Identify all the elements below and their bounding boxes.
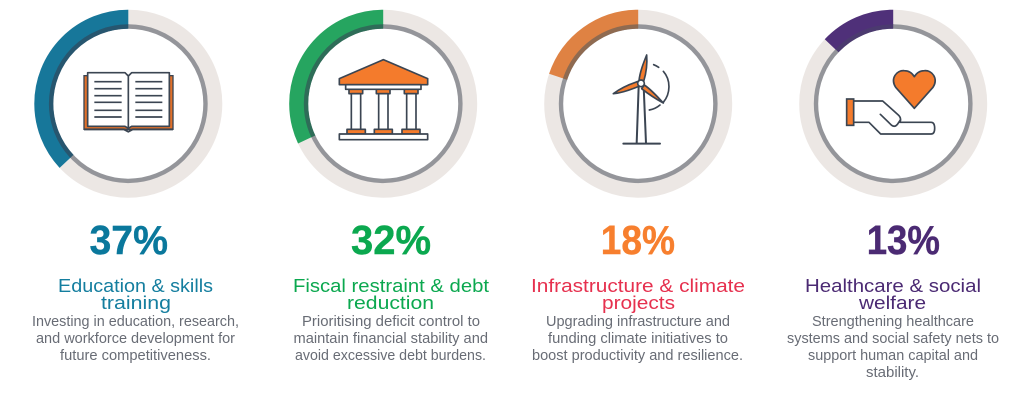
text block: fiscal: Prioritising deficit control to	[302, 313, 480, 330]
panel: healthcare	[787, 17, 999, 381]
percentage: 32%: 32%	[351, 217, 431, 263]
text block: education	[32, 313, 239, 364]
heading: fiscal	[293, 275, 489, 313]
heading: education: Education & skills	[58, 275, 213, 296]
percentage: 37%: 37%	[90, 217, 168, 263]
text block: healthcare	[787, 313, 999, 381]
heading: education	[58, 275, 213, 313]
text block: healthcare: support human capital and	[808, 347, 978, 364]
icon: open book	[84, 73, 173, 132]
donut chart: 32%	[297, 17, 470, 190]
percentage: 18%: 18%	[601, 217, 675, 263]
heading: healthcare: welfare	[858, 292, 926, 313]
text block: infrastructure: Upgrading infrastructure and	[546, 313, 730, 330]
heading: fiscal: Fiscal restraint & debt	[293, 275, 489, 296]
panel: infrastructure	[531, 17, 745, 364]
text block: fiscal	[294, 313, 488, 364]
text block: infrastructure	[532, 313, 743, 364]
heading: infrastructure: projects	[602, 292, 675, 313]
text block: fiscal: maintain financial stability and	[294, 330, 488, 347]
percentage: 13%: 13%	[867, 217, 940, 263]
text block: education: Investing in education, research,	[32, 313, 239, 330]
panel: education	[32, 17, 239, 364]
text block: infrastructure: boost productivity and resilience.	[532, 347, 743, 364]
panel: fiscal	[293, 17, 489, 364]
heading: education: training	[101, 292, 171, 313]
donut chart: 13%	[807, 17, 980, 190]
text block: healthcare: Strengthening healthcare	[812, 313, 974, 330]
icon: wind turbine	[613, 55, 669, 144]
text block: education: future competitiveness.	[60, 347, 211, 364]
text block: fiscal: avoid excessive debt burdens.	[295, 347, 486, 364]
text block: infrastructure: funding climate initiatives to	[548, 330, 728, 347]
donut chart: 18%	[552, 17, 725, 190]
heading: infrastructure	[531, 275, 745, 313]
icon: hand holding heart	[847, 71, 935, 134]
text block: healthcare: systems and social safety nets to	[787, 330, 999, 347]
text block: education: and workforce development for	[36, 330, 235, 347]
heading: infrastructure: Infrastructure & climate	[531, 275, 745, 296]
donut chart: 37%	[42, 17, 215, 190]
heading: fiscal: reduction	[347, 292, 434, 313]
icon: government building	[339, 60, 428, 140]
text block: healthcare: stability.	[866, 364, 919, 381]
heading: healthcare: Healthcare & social	[805, 275, 981, 296]
heading: healthcare	[805, 275, 981, 313]
